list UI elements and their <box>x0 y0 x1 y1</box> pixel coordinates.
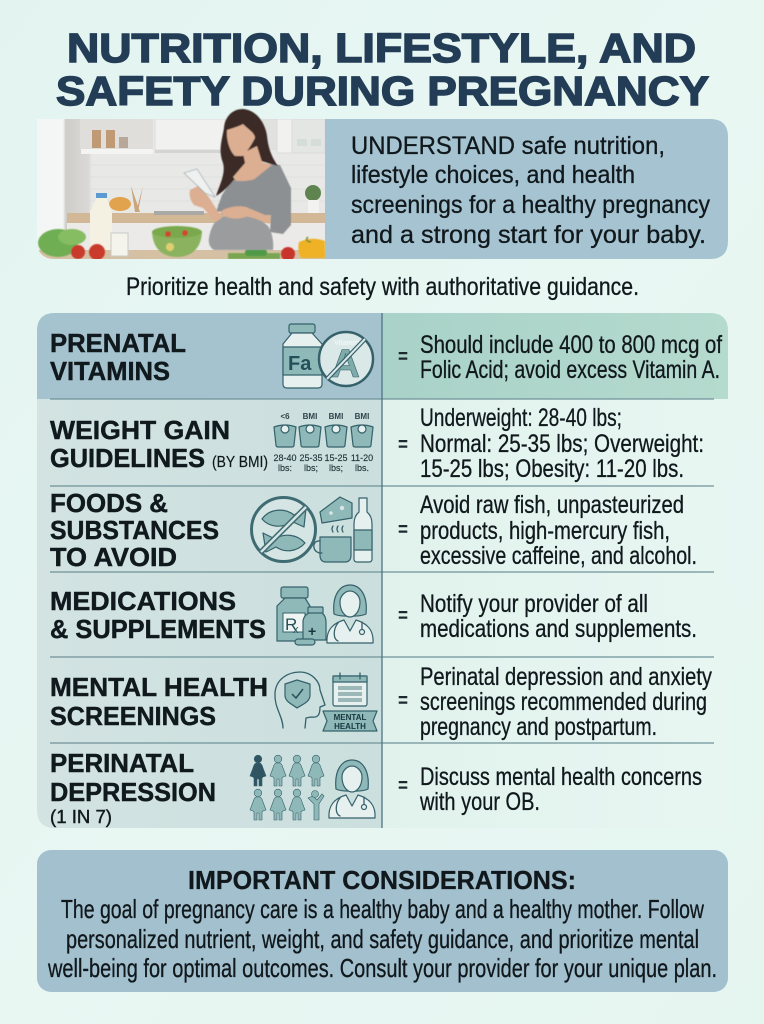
icon: four scales with BMI ranges: lbs; <box>329 463 343 473</box>
icon: four scales with BMI ranges: lbs: <box>278 463 292 473</box>
intro text: lifestyle choices, and health <box>351 161 635 189</box>
title: NUTRITION, LIFESTYLE, AND <box>67 25 696 71</box>
intro text: screenings for a healthy pregnancy <box>351 191 710 219</box>
title: SAFETY DURING PREGNANCY <box>56 68 709 114</box>
row 4 description: Notify your provider of all <box>420 590 648 618</box>
subheading: Prioritize health and safety with authoritative guidance. <box>126 273 639 301</box>
equals sign: = <box>398 605 408 627</box>
row 1 label <box>50 328 186 386</box>
equals sign: = <box>398 434 408 456</box>
row: medications <box>50 585 697 645</box>
icon: no fish, cheese, coffee, wine <box>252 497 372 562</box>
icon: folic acid bottle and no vitamin A: Fa <box>288 353 312 375</box>
icon: one in seven people and doctor <box>250 755 375 820</box>
row 2 label: WEIGHT GAIN <box>50 415 230 445</box>
row 1 label: PRENATAL <box>50 328 186 358</box>
row 2 description <box>420 404 704 483</box>
intro text: and a strong start for your baby. <box>351 221 706 249</box>
row 2 description: 15-25 lbs; Obesity: 11-20 lbs. <box>420 455 684 483</box>
row 3 description: products, high-mercury fish, <box>420 517 670 545</box>
row 5 description <box>420 663 712 741</box>
considerations body <box>47 894 717 983</box>
row 5 label <box>50 672 268 731</box>
intro text <box>351 132 710 249</box>
row 6 label: DEPRESSION <box>50 777 216 807</box>
row 5 label: MENTAL HEALTH <box>50 672 268 702</box>
icon: head with shield, calendar, banner: MENTAL <box>334 713 366 722</box>
title <box>56 25 709 114</box>
row: weight gain <box>50 404 704 483</box>
icon: prescription bottles and doctor: x <box>293 624 299 636</box>
intro text: UNDERSTAND safe nutrition, <box>351 132 665 160</box>
row 2 label <box>50 415 268 473</box>
icon: four scales with BMI ranges: BMI <box>329 412 343 421</box>
icon: folic acid bottle and no vitamin A: A <box>331 342 360 386</box>
row 1 description <box>420 331 722 384</box>
icon: prescription bottles and doctor: + <box>308 623 316 639</box>
icon: four scales with BMI ranges: 15-25 <box>324 453 348 463</box>
row 3 label <box>50 488 219 572</box>
row 6 description: Discuss mental health concerns <box>420 763 702 791</box>
icon: four scales with BMI ranges: BMI <box>303 412 317 421</box>
icon: prescription bottles and doctor <box>277 585 373 645</box>
icon: four scales with BMI ranges: <6 <box>280 412 290 421</box>
row 3 label: TO AVOID <box>50 542 177 572</box>
row 6 label <box>50 748 216 827</box>
equals sign: = <box>398 690 408 712</box>
icon: head with shield, calendar, banner <box>275 672 377 731</box>
row 2 description: Underweight: 28-40 lbs; <box>420 404 622 432</box>
row 4 description <box>420 590 697 643</box>
row 2 label: (BY BMI) <box>212 454 268 471</box>
equals sign: = <box>398 775 408 797</box>
row 1 label: VITAMINS <box>50 356 170 386</box>
icon: four scales with BMI ranges: 25-35 <box>299 453 323 463</box>
row 3 label: FOODS & <box>50 488 168 518</box>
row 3 label: SUBSTANCES <box>50 515 219 545</box>
row: mental health <box>50 663 712 741</box>
row 4 label: & SUPPLEMENTS <box>50 614 266 644</box>
row 3 description <box>420 491 697 570</box>
equals sign: = <box>398 519 408 541</box>
icon: four scales with BMI ranges: 11-20 <box>351 453 373 463</box>
row: perinatal depression <box>50 748 702 827</box>
icon: four scales with BMI ranges: BMI <box>355 412 369 421</box>
row 2 description: Normal: 25-35 lbs; Overweight: <box>420 430 704 458</box>
considerations heading: IMPORTANT CONSIDERATIONS: <box>188 865 576 895</box>
row 6 label: (1 IN 7) <box>50 807 112 827</box>
icon: four scales with BMI ranges: 28-40 <box>273 453 297 463</box>
icon: prescription bottles and doctor: R <box>285 615 297 634</box>
row 6 description: with your OB. <box>419 788 540 816</box>
icon: folic acid bottle and no vitamin A: Vitamin <box>334 340 359 347</box>
row 3 description: excessive caffeine, and alcohol. <box>420 542 697 570</box>
icon: four scales with BMI ranges <box>273 412 373 473</box>
row 4 label <box>50 586 266 644</box>
equals sign: = <box>398 346 408 368</box>
row: prenatal vitamins <box>50 324 722 388</box>
row 5 description: pregnancy and postpartum. <box>420 713 657 741</box>
icon: four scales with BMI ranges: lbs; <box>304 463 318 473</box>
comparison table <box>37 313 728 828</box>
row 2 label: GUIDELINES <box>50 443 205 473</box>
hero photo: pregnant woman in kitchen <box>37 109 325 261</box>
row 4 description: medications and supplements. <box>420 615 697 643</box>
icon: four scales with BMI ranges: lbs. <box>355 463 369 473</box>
row 4 label: MEDICATIONS <box>50 586 236 616</box>
row 6 label: PERINATAL <box>50 748 194 778</box>
icon: head with shield, calendar, banner: HEALTH <box>334 722 366 731</box>
panel: important considerations <box>37 850 728 992</box>
panel: intro <box>325 119 728 259</box>
row 3 description: Avoid raw fish, unpasteurized <box>420 491 684 519</box>
row: foods to avoid <box>50 488 697 572</box>
row 6 description <box>419 763 702 816</box>
icon: folic acid bottle and no vitamin A <box>283 324 373 388</box>
row 5 label: SCREENINGS <box>50 701 216 731</box>
